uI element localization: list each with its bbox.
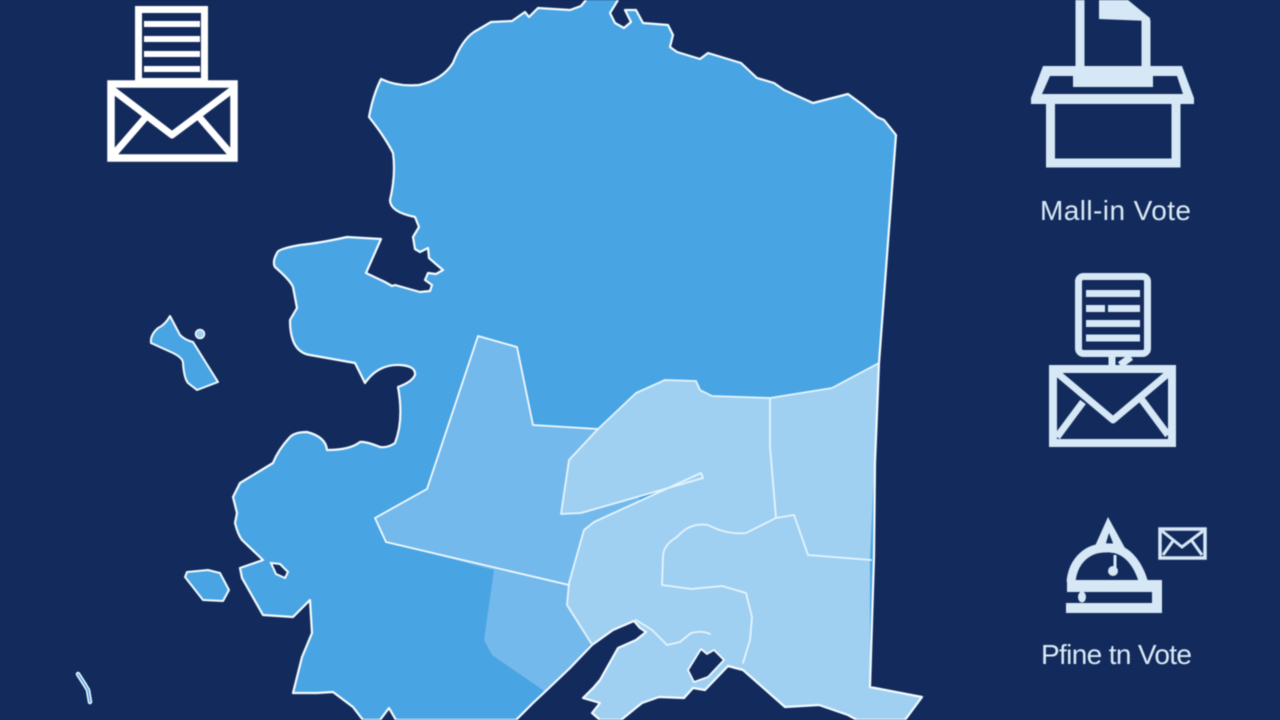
coastline outline <box>233 0 922 720</box>
island: south-west <box>185 570 229 601</box>
lagoon <box>271 563 288 578</box>
island: north-west <box>151 316 218 390</box>
islet <box>196 330 204 338</box>
region boundary lines <box>375 336 879 663</box>
icon: bell with small envelope (right bottom) <box>1066 517 1205 613</box>
label: Mall-in Vote: Mall-in Vote <box>1040 195 1191 226</box>
icon: document and envelope (right middle) <box>1053 276 1172 443</box>
icon: ballot box (right top) <box>1031 0 1194 163</box>
mid-blue region <box>375 336 640 695</box>
mainland base region <box>233 0 922 720</box>
label: Pfine tn Vote: Pfine tn Vote <box>1041 639 1192 670</box>
light-blue region <box>561 363 922 720</box>
map of Alaska regions <box>78 0 922 720</box>
island: sliver <box>78 674 90 702</box>
lake <box>688 649 724 682</box>
icon: ballot in envelope (left) <box>111 10 234 158</box>
